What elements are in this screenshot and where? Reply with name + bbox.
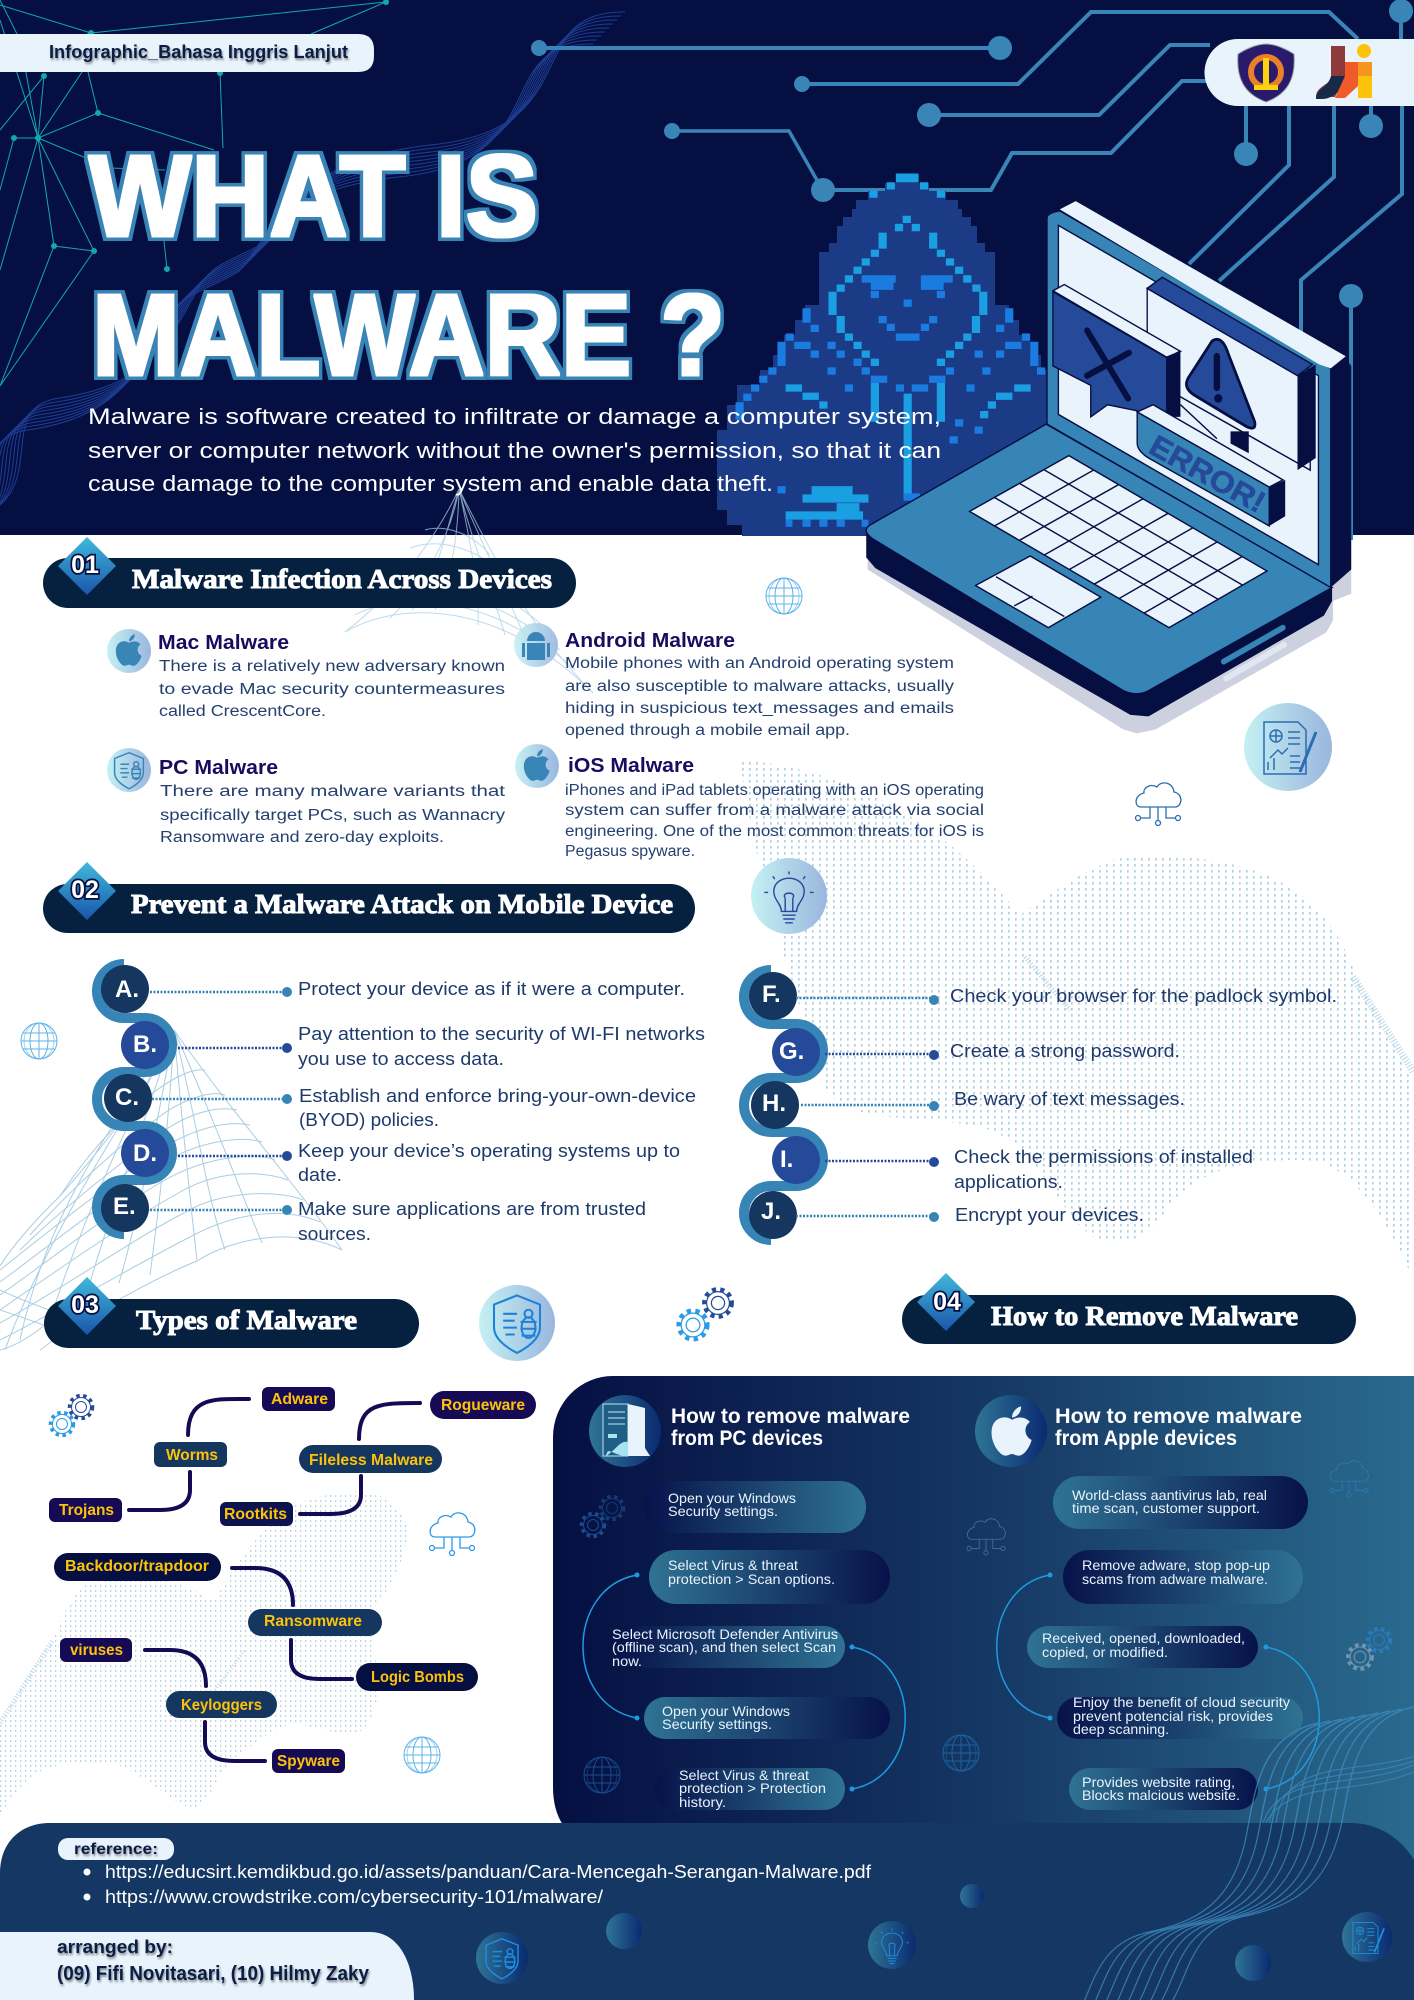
item: PC Malware: specifically target PCs, such as Wannacry: [160, 807, 505, 824]
Apple step 2: Remove adware, stop pop-up: [1082, 1557, 1270, 1573]
tip E: [101, 1184, 646, 1244]
PC step 3: [612, 1626, 845, 1669]
tip B: you use to access data.: [298, 1049, 504, 1069]
section 03 heading: Types of Malware: [136, 1305, 357, 1335]
Apple column heading: from Apple devices: [1055, 1427, 1237, 1450]
arranged by credit: (09) Fifi Novitasari, (10) Hilmy Zaky: [57, 1963, 370, 1985]
Apple column heading: How to remove malware: [1055, 1405, 1302, 1428]
tip A: Protect your device as if it were a computer.: [298, 979, 685, 999]
PC step 3: Select Microsoft Defender Antivirus: [612, 1626, 838, 1642]
section 04 heading: How to Remove Malware: [991, 1301, 1298, 1331]
item: Android Malware: Android Malware: [565, 630, 735, 652]
course label pill: [0, 34, 374, 72]
background: header wire mesh: [345, 489, 593, 693]
panel: how to remove malware: [553, 1376, 1414, 2000]
tip D: [121, 1129, 680, 1185]
PC column heading: [589, 1395, 910, 1467]
section 03 heading: [44, 1277, 419, 1348]
PC step 1: [644, 1481, 866, 1533]
PC step 5: Select Virus & threat: [679, 1767, 809, 1783]
item: Android Malware: Mobile phones with an Android operating system: [565, 655, 954, 672]
malware type tag: Adware: Adware: [271, 1391, 328, 1408]
section 01 heading: [43, 537, 576, 608]
tips list A to E: [97, 964, 705, 1244]
title: MALWARE ?: [92, 270, 725, 400]
PC step 3: now.: [612, 1653, 642, 1669]
tip B: Pay attention to the security of WI-FI networks: [298, 1024, 705, 1044]
tip H: Be wary of text messages.: [954, 1089, 1185, 1109]
item: Mac Malware: called CrescentCore.: [159, 703, 326, 720]
item: PC Malware: Ransomware and zero-day exploits.: [160, 829, 444, 846]
item: Mac Malware: There is a relatively new adversary known: [159, 658, 505, 675]
section 02 heading: Prevent a Malware Attack on Mobile Device: [131, 889, 673, 919]
malware type tag: Rootkits: Rootkits: [224, 1506, 287, 1523]
section 01 heading: Malware Infection Across Devices: [132, 564, 552, 594]
PC column heading: from PC devices: [671, 1427, 823, 1450]
Apple step 3: Received, opened, downloaded,: [1042, 1630, 1245, 1646]
intro paragraph: server or computer network without the owner's permission, so that it can: [88, 438, 941, 463]
item: iOS Malware: engineering. One of the most common threats for iOS is: [565, 823, 984, 840]
tip F: F.: [762, 981, 781, 1008]
Apple step 1: time scan, customer support.: [1072, 1500, 1260, 1516]
tip F: [749, 972, 1337, 1020]
item: iOS Malware: system can suffer from a malware attack via social: [565, 802, 984, 819]
malware type tag: Backdoor/trapdoor: [54, 1553, 221, 1581]
tip I: applications.: [954, 1172, 1063, 1192]
PC step arrows: [583, 1572, 905, 1792]
tips list F to J: [744, 970, 1337, 1240]
tip I: I.: [780, 1146, 793, 1173]
panel wave lines: [1074, 1707, 1414, 2000]
tip C: Establish and enforce bring-your-own-device: [299, 1086, 696, 1106]
malware type tag: Backdoor/trapdoor: Backdoor/trapdoor: [65, 1558, 209, 1575]
PC column heading: How to remove malware: [671, 1405, 910, 1428]
malware type tag: Fileless Malware: [299, 1445, 442, 1473]
tip C: (BYOD) policies.: [299, 1110, 439, 1130]
decorative icon: globe section 1: [766, 578, 802, 614]
tip G: [772, 1028, 1180, 1076]
reference links: https://educsirt.kemdikbud.go.id/assets/panduan/Cara-Mencegah-Serangan-Malware.pdf: [105, 1862, 872, 1882]
PC step 1: Security settings.: [668, 1503, 778, 1519]
malware type tag: Rogueware: Rogueware: [441, 1397, 525, 1414]
background: wire mesh lower left: [0, 1030, 342, 1350]
Apple step 4: Enjoy the benefit of cloud security: [1073, 1694, 1290, 1710]
section 02 heading: 02: [71, 876, 99, 904]
tip E: Make sure applications are from trusted: [298, 1199, 646, 1219]
title: WHAT IS: [89, 131, 538, 261]
malware type tag: Worms: [154, 1442, 227, 1467]
PC step 5: [655, 1767, 845, 1810]
tip C: [104, 1074, 696, 1130]
malware type tag: Keyloggers: [166, 1691, 277, 1718]
malware types connector lines: [129, 1399, 420, 1761]
Apple step 3: [1027, 1626, 1258, 1668]
background: dotted wave field right: [740, 760, 1414, 1280]
malware type tag: Rootkits: [220, 1502, 293, 1526]
decorative icon: cloud types: [430, 1513, 475, 1556]
section 04 heading: 04: [933, 1288, 961, 1316]
decorative icon: globe types: [404, 1737, 440, 1773]
malware type tag: viruses: [60, 1638, 132, 1662]
item: Android Malware: are also susceptible to malware attacks, usually: [565, 678, 954, 695]
malware type tag: Trojans: Trojans: [59, 1502, 114, 1519]
header background: [0, 0, 1414, 535]
Apple step 4: prevent potencial risk, provides: [1073, 1708, 1273, 1724]
item: Mac Malware: to evade Mac security countermeasures: [159, 681, 505, 698]
section 01 heading: 01: [71, 551, 99, 579]
intro paragraph: [88, 404, 941, 496]
intro paragraph: Malware is software created to infiltrate or damage a computer system,: [88, 404, 941, 429]
illustration: laptop with error windows: [866, 201, 1351, 733]
PC step 5: protection > Protection: [679, 1780, 826, 1796]
intro paragraph: cause damage to the computer system and enable data theft.: [88, 471, 773, 496]
decorative icon: light bulb circle: [751, 858, 827, 934]
PC step 2: [649, 1550, 890, 1604]
Apple step 1: [1053, 1476, 1308, 1529]
tip H: H.: [762, 1090, 786, 1117]
malware type tag: viruses: viruses: [70, 1642, 123, 1659]
arranged by credit: [0, 1932, 414, 2000]
malware type tag: Ransomware: [248, 1609, 382, 1636]
illustration: pixel art hacker: [717, 174, 1097, 536]
decorative icon: globe left: [21, 1023, 57, 1059]
malware type tag: Spyware: Spyware: [277, 1753, 340, 1770]
section 03 heading: 03: [71, 1291, 99, 1319]
PC step 2: Select Virus & threat: [668, 1557, 798, 1573]
PC step 4: [644, 1697, 890, 1739]
tip G: Create a strong password.: [950, 1041, 1180, 1061]
item: iOS Malware: [515, 744, 984, 860]
PC step 4: Open your Windows: [662, 1703, 790, 1719]
PC step 2: protection > Scan options.: [668, 1571, 835, 1587]
malware type tag: Fileless Malware: Fileless Malware: [309, 1452, 433, 1469]
item: iOS Malware: iPhones and iPad tablets operating with an iOS operating: [565, 782, 984, 799]
Apple step 3: copied, or modified.: [1042, 1644, 1168, 1660]
title: [89, 131, 725, 400]
malware type tag: Keyloggers: Keyloggers: [181, 1697, 262, 1714]
malware type tag: Trojans: [49, 1498, 122, 1522]
Apple step 5: Blocks malcious website.: [1082, 1787, 1240, 1803]
item: iOS Malware: Pegasus spyware.: [565, 843, 695, 860]
tip G: G.: [779, 1038, 804, 1065]
item: Android Malware: [514, 623, 954, 739]
Apple column heading: [975, 1395, 1302, 1467]
tip D: D.: [133, 1140, 157, 1167]
circuit lines with nodes: [531, 0, 1413, 540]
background: header wave lines: [0, 12, 625, 537]
tip E: sources.: [298, 1224, 371, 1244]
tip F: Check your browser for the padlock symbol.: [950, 986, 1337, 1006]
course label pill: Infographic_Bahasa Inggris Lanjut: [49, 42, 348, 62]
decorative icon: document circle: [1244, 703, 1332, 791]
Apple step arrows: [997, 1572, 1319, 1792]
PC step 4: Security settings.: [662, 1716, 772, 1732]
section 02 heading: [43, 862, 695, 933]
tip D: Keep your device’s operating systems up to: [298, 1141, 680, 1161]
background: dotted wave field lower left: [0, 1491, 408, 1816]
PC step 3: (offline scan), and then select Scan: [612, 1639, 836, 1655]
tip I: Check the permissions of installed: [954, 1147, 1253, 1167]
item: Mac Malware: Mac Malware: [158, 632, 289, 654]
reference label: [58, 1838, 174, 1860]
decorative icon: cloud network: [1136, 783, 1181, 826]
decorative icon: gears centre: [679, 1289, 732, 1339]
malware type tag: Spyware: [272, 1749, 345, 1773]
Apple step 2: [1063, 1550, 1303, 1604]
Apple step 5: [1069, 1768, 1258, 1810]
item: PC Malware: PC Malware: [159, 757, 278, 779]
illustration: laptop with error windows: ERROR!: [1144, 429, 1271, 520]
reference links: [84, 1862, 872, 1907]
footer wave lines: [1074, 1707, 1414, 2000]
malware type tag: Worms: Worms: [166, 1447, 218, 1464]
tip A: A.: [115, 976, 139, 1003]
tip B: B.: [133, 1031, 157, 1058]
malware type tag: Logic Bombs: Logic Bombs: [371, 1669, 464, 1686]
malware type tag: Rogueware: [430, 1391, 536, 1419]
item: iOS Malware: iOS Malware: [568, 755, 694, 777]
logos pill: [1204, 39, 1414, 106]
item: PC Malware: [107, 748, 506, 846]
section 04 heading: [902, 1273, 1356, 1344]
arranged by credit: arranged by:: [57, 1937, 173, 1957]
tip D: date.: [298, 1165, 342, 1185]
item: PC Malware: There are many malware variants that: [160, 783, 506, 800]
Apple step 4: [1057, 1694, 1303, 1739]
tip B: [121, 1021, 705, 1069]
tip J: J.: [761, 1198, 781, 1225]
Apple step 2: scams from adware malware.: [1082, 1571, 1268, 1587]
item: Android Malware: opened through a mobile email app.: [565, 722, 850, 739]
reference links: https://www.crowdstrike.com/cybersecurity-101/malware/: [105, 1887, 603, 1907]
Apple step 5: Provides website rating,: [1082, 1774, 1235, 1790]
panel decorative icons: [582, 1461, 1390, 1793]
Apple step 1: World-class aantivirus lab, real: [1072, 1487, 1267, 1503]
reference label: reference:: [74, 1841, 158, 1858]
malware type tag: Adware: [262, 1387, 335, 1411]
decorative icon: shield with bug: [479, 1285, 555, 1361]
item: Mac Malware: [107, 629, 505, 720]
tip E: E.: [113, 1193, 136, 1220]
malware type tag: Logic Bombs: [356, 1663, 478, 1691]
Apple step 4: deep scanning.: [1073, 1721, 1169, 1737]
malware type tag: Ransomware: Ransomware: [264, 1613, 362, 1630]
item: Android Malware: hiding in suspicious text_messages and emails: [565, 700, 954, 717]
PC step 1: Open your Windows: [668, 1490, 796, 1506]
tip J: [749, 1191, 1144, 1239]
background: network lines top left: [0, 0, 388, 386]
tip J: Encrypt your devices.: [955, 1205, 1144, 1225]
tip A: [101, 965, 685, 1013]
tip I: [772, 1136, 1253, 1192]
decorative icon: gears types: [50, 1396, 92, 1436]
footer decorative circles: [476, 1884, 1392, 1984]
PC step 5: history.: [679, 1794, 726, 1810]
footer panel: [0, 1707, 1414, 2000]
tip C: C.: [115, 1084, 139, 1111]
tip H: [751, 1081, 1185, 1129]
